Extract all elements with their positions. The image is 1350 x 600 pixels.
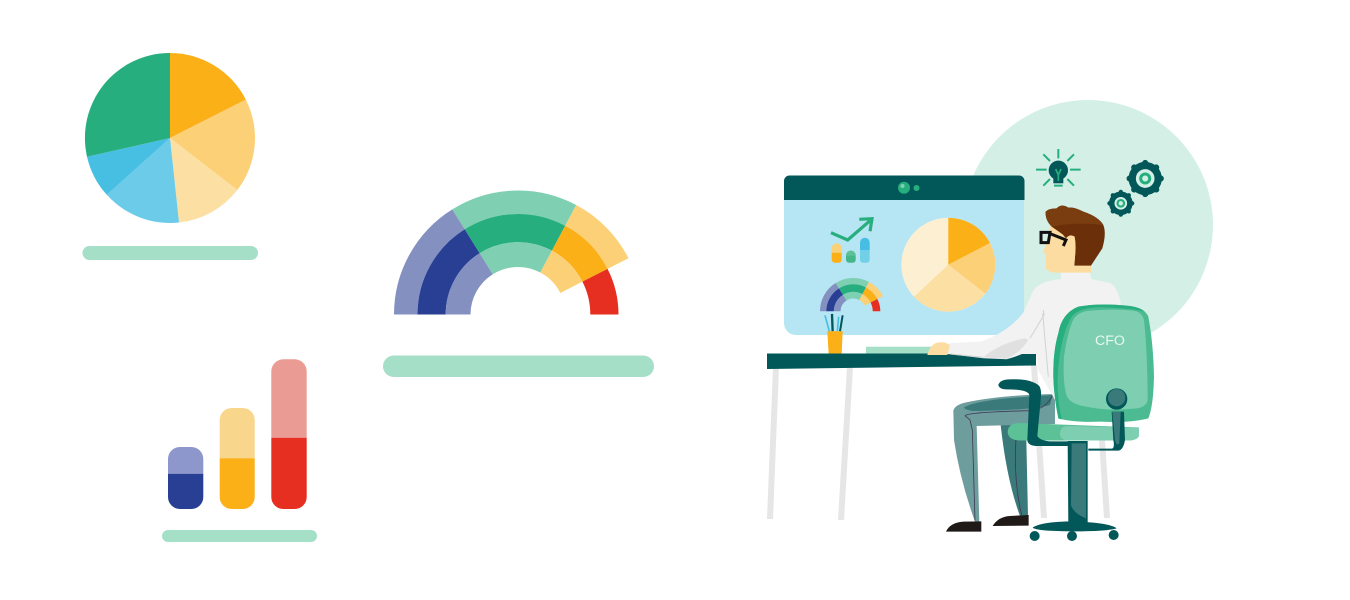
- sleeve fold: [983, 338, 1028, 359]
- chair armrest stem: [1112, 412, 1121, 444]
- icon: small gear: [1107, 190, 1134, 217]
- monitor screen: [784, 200, 1024, 335]
- screen bar chart: [832, 238, 870, 263]
- gauge chart label bar: [383, 356, 654, 377]
- icon: large gear: [1127, 160, 1164, 197]
- shirt: [947, 272, 1126, 400]
- pencil cup: [825, 314, 843, 354]
- hair highlight: [1046, 206, 1103, 227]
- desk legs: [767, 365, 1110, 520]
- chair back: [1053, 304, 1154, 422]
- chair armrest left: [998, 379, 1070, 446]
- background circle: [963, 100, 1213, 350]
- pie chart: [85, 53, 255, 223]
- chair seat: [1008, 423, 1139, 440]
- chair back and arms: [998, 304, 1154, 451]
- chair armrest right: [1088, 412, 1125, 451]
- hand: [927, 342, 950, 355]
- chair label: CFO: [1095, 333, 1125, 349]
- monitor webcam: [898, 182, 920, 194]
- gauge chart: [406, 202, 618, 314]
- screen trend arrow: [831, 219, 872, 240]
- monitor: [784, 176, 1024, 335]
- head: [1041, 206, 1105, 273]
- pie chart label bar: [82, 246, 258, 260]
- bar chart label bar: [162, 530, 317, 542]
- front leg and thigh: [953, 394, 1055, 522]
- ear: [1066, 235, 1076, 260]
- back leg: [1001, 425, 1028, 516]
- hair: [1046, 206, 1105, 266]
- thigh shadow: [964, 395, 1053, 411]
- shirt crease: [950, 310, 1048, 377]
- glasses: [1041, 232, 1066, 246]
- desk pad: [866, 347, 933, 354]
- screen gauge chart: [823, 281, 880, 311]
- person legs: [946, 394, 1055, 532]
- shoes: [946, 515, 1029, 532]
- chair back dark edge: [1053, 304, 1145, 419]
- monitor header: [784, 176, 1024, 200]
- chair seat highlight: [1060, 426, 1139, 440]
- neck and face: [1043, 227, 1091, 273]
- chair wheels: [1030, 530, 1119, 541]
- chair base: [1033, 521, 1117, 531]
- screen pie chart: [901, 218, 995, 312]
- chair knob: [1106, 388, 1127, 410]
- chair column: [1030, 441, 1119, 541]
- trouser creases: [965, 395, 1053, 521]
- desk top: [767, 354, 1036, 369]
- bar chart: [168, 359, 307, 509]
- icon: light bulb: [1036, 149, 1081, 186]
- chair back panel: [1064, 310, 1148, 410]
